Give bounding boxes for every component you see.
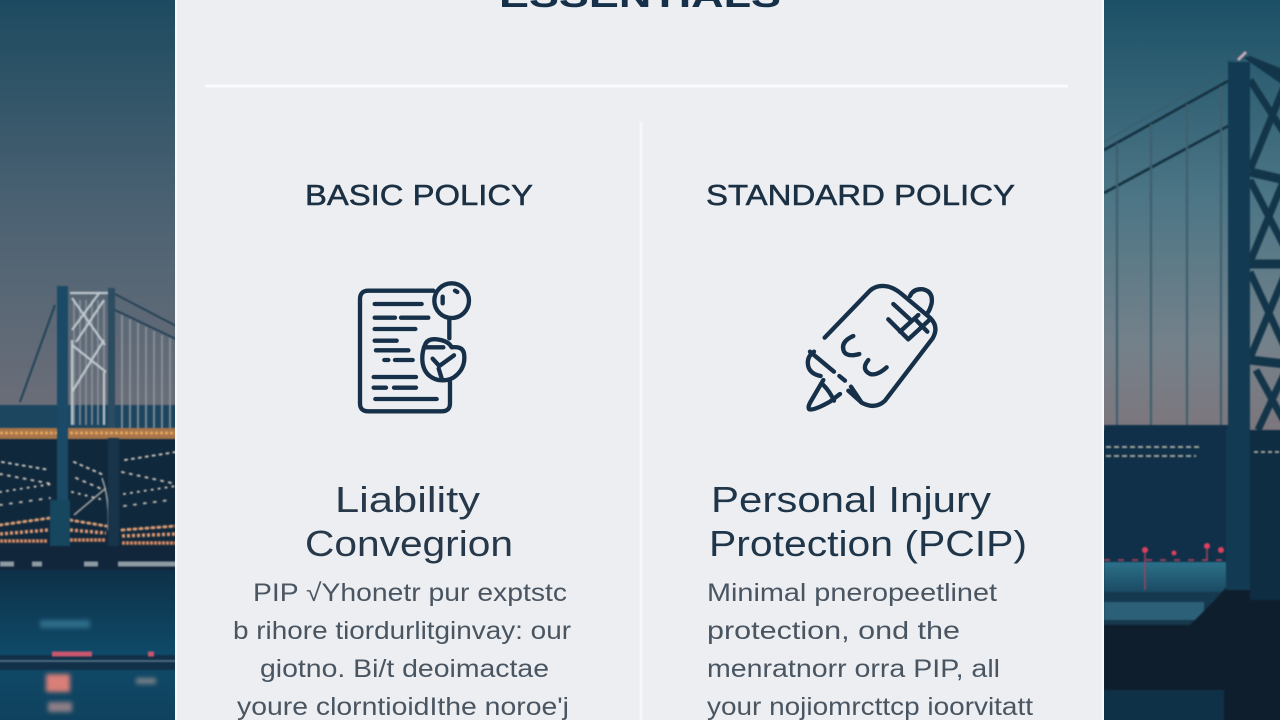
- body text: basic policy: [233, 579, 571, 720]
- icon: policy document with magnifier and shield: [360, 283, 469, 411]
- main content panel: [176, 0, 1103, 720]
- subheading: liability convegrion: Liability: [335, 479, 480, 520]
- body text: basic policy: giotno. Bi/t deoimactae: [260, 655, 549, 683]
- subheading: liability convegrion: Convegrion: [305, 523, 513, 564]
- subheading: personal injury protection: [709, 479, 1027, 564]
- body text: standard policy: protection, ond the: [707, 617, 960, 645]
- background photo: left bridge at dusk: [0, 0, 178, 720]
- body text: basic policy: PIP √Yhonetr pur exptstc: [253, 579, 567, 607]
- panel: standard policy: [706, 180, 1033, 720]
- body text: standard policy: [707, 579, 1033, 720]
- heading: standard policy: STANDARD POLICY: [706, 180, 1015, 212]
- subheading: liability convegrion: [305, 479, 513, 564]
- body text: basic policy: b rihore tiordurlitginvay: our: [233, 617, 571, 645]
- subheading: personal injury protection: Personal Injury: [711, 479, 991, 520]
- heading: basic policy: BASIC POLICY: [305, 180, 533, 212]
- background photo: reflections on left water: [40, 620, 156, 712]
- body text: standard policy: menratnorr orra PIP, all: [707, 655, 1000, 683]
- icon: tilted capsule tag: [808, 286, 935, 409]
- subheading: personal injury protection: Protection (PCIP): [709, 523, 1027, 564]
- panel: basic policy: [233, 180, 571, 720]
- body text: standard policy: Minimal pneropeetlinet: [707, 579, 997, 607]
- background photo: right bridge at dusk: [1100, 0, 1280, 720]
